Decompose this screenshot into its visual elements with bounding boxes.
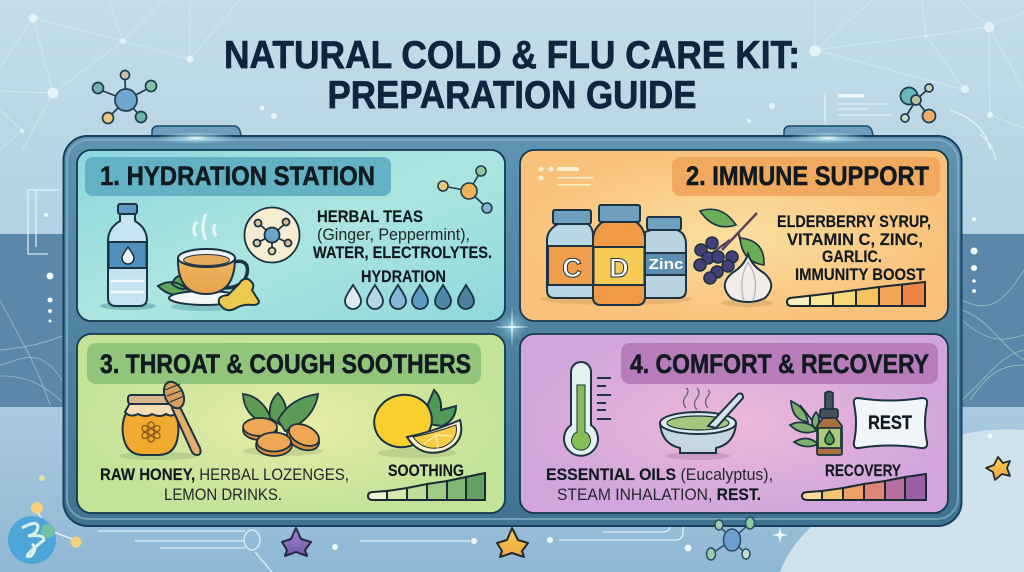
heading 1: 1. HYDRATION STATION: [100, 161, 375, 191]
text: immune items: ELDERBERRY SYRUP,: [777, 213, 931, 231]
device frame: [64, 126, 962, 526]
icon: rest pillow: REST: [868, 413, 912, 434]
heading 4: 4. COMFORT & RECOVERY: [630, 349, 929, 379]
text: immune items: IMMUNITY BOOST: [795, 266, 925, 284]
panel 2: immune support: [520, 150, 948, 321]
icon: essential oil bottle: [790, 392, 842, 455]
icon: thermometer: [564, 362, 611, 456]
heading 3: 3. THROAT & COUGH SOOTHERS: [100, 349, 471, 379]
icon: molecule top right: [900, 84, 936, 122]
text: soothers: [100, 466, 349, 504]
soothing meter: SOOTHING: [388, 462, 464, 480]
panel 1: hydration station: [77, 150, 505, 321]
text: immune items: [777, 213, 931, 284]
heading 4: [621, 343, 938, 384]
hydration drops meter: HYDRATION: [361, 268, 446, 286]
immunity boost meter: [787, 282, 925, 306]
soothing meter: [368, 462, 485, 500]
decorative data lines: [538, 166, 593, 186]
panel 4: comfort and recovery: [520, 334, 948, 513]
text: soothers: RAW HONEY, HERBAL LOZENGES,: [100, 466, 349, 484]
icon: elderberry and garlic: [694, 209, 773, 307]
icon: tea cup with ginger: [158, 214, 259, 311]
icon: rest pillow: [854, 398, 927, 448]
icon: small molecule: [438, 166, 492, 213]
text: immune items: GARLIC.: [822, 248, 882, 266]
icon: herbal lozenges: [243, 393, 323, 456]
text: comfort items: [546, 466, 773, 504]
title: [224, 34, 800, 117]
icon: honey jar and dipper: [118, 379, 201, 460]
icon: vitamin bottles: [540, 205, 692, 305]
icon: water bottle: [100, 204, 156, 310]
icon: molecule bottom: [706, 517, 754, 560]
recovery meter: RECOVERY: [825, 462, 901, 480]
heading 1: [85, 157, 391, 196]
icon: logo: [8, 502, 82, 564]
icon: vitamin bottles: D: [609, 253, 629, 283]
text: comfort items: ESSENTIAL OILS (Eucalyptus),: [546, 466, 773, 484]
text: hydration items: HERBAL TEAS: [317, 208, 423, 226]
title: NATURAL COLD & FLU CARE KIT:: [224, 34, 800, 77]
center sparkle: [494, 306, 530, 348]
icon: purple star: [282, 528, 311, 556]
icon: lemon: [368, 388, 461, 458]
heading 2: 2. IMMUNE SUPPORT: [686, 161, 929, 191]
text: soothers: LEMON DRINKS.: [164, 486, 282, 504]
recovery meter: [802, 462, 926, 500]
icon: gold star: [497, 528, 528, 557]
icon: vitamin bottles: Zinc: [648, 256, 684, 273]
heading 3: [87, 343, 481, 384]
text: hydration items: WATER, ELECTROLYTES.: [313, 244, 492, 262]
title: PREPARATION GUIDE: [328, 74, 696, 117]
heading 2: [672, 157, 940, 196]
icon: vitamin bottles: C: [562, 253, 582, 283]
text: hydration items: (Ginger, Peppermint),: [317, 226, 470, 244]
icon: steam bowl: [660, 388, 743, 460]
hydration drops meter: [345, 268, 474, 309]
icon: molecule badge: [244, 208, 300, 262]
panel 3: throat and cough soothers: [77, 334, 505, 513]
text: comfort items: STEAM INHALATION, REST.: [557, 486, 761, 504]
text: immune items: VITAMIN C, ZINC,: [787, 231, 923, 249]
text: hydration items: [313, 208, 492, 262]
icon: molecule top left: [92, 70, 156, 124]
icon: small gold star right: [986, 457, 1010, 480]
